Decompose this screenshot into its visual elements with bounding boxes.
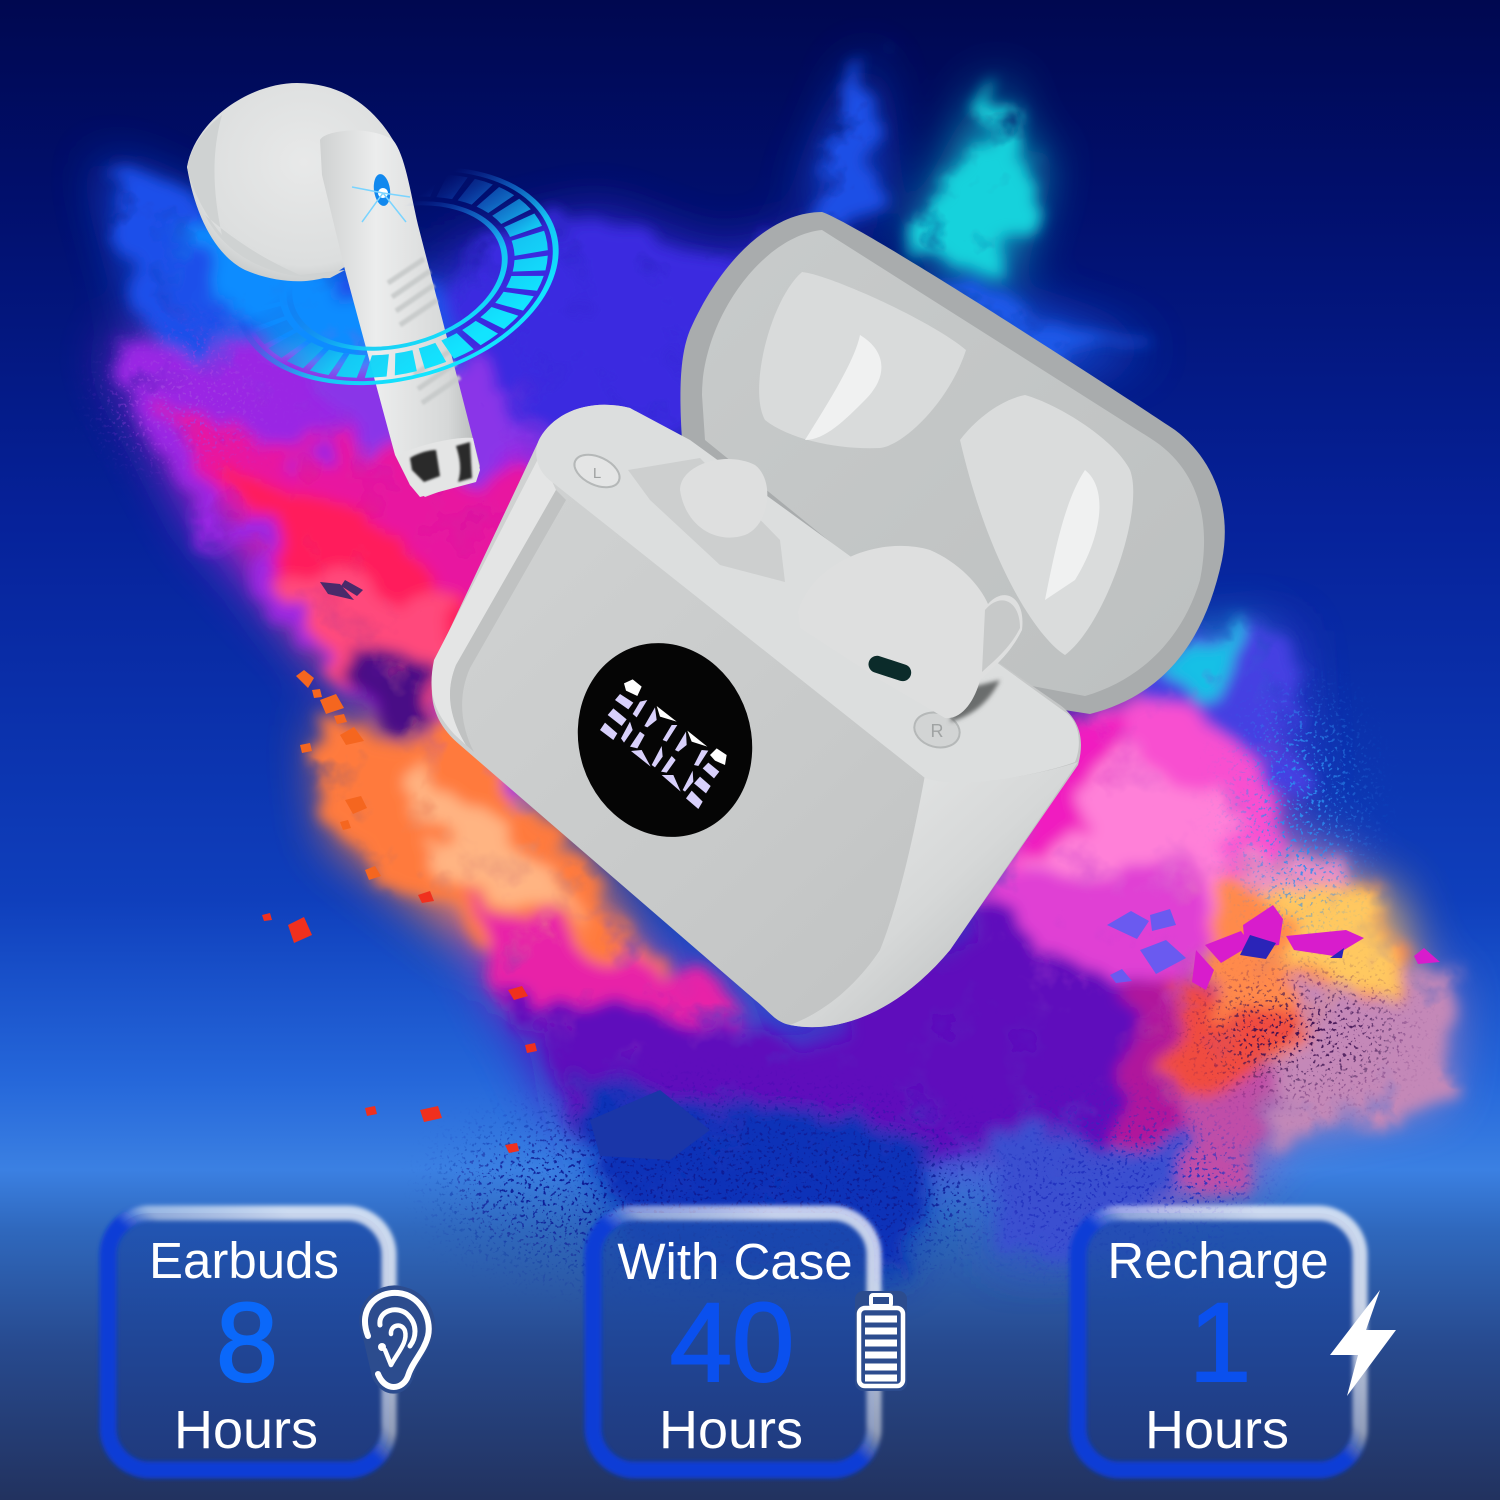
deck left cavity bbox=[628, 458, 785, 582]
card label: With Case bbox=[617, 1233, 853, 1290]
lid left cavity bbox=[759, 272, 966, 448]
earbud stem bbox=[320, 131, 480, 497]
sound ring bbox=[214, 135, 580, 417]
icon: battery bbox=[855, 1291, 907, 1391]
card frame bbox=[593, 1213, 874, 1470]
L marker: L bbox=[593, 465, 601, 482]
R marker bbox=[910, 708, 964, 752]
card frame bbox=[108, 1213, 389, 1470]
powder shards bbox=[262, 580, 1440, 1160]
card unit: Hours bbox=[174, 1400, 318, 1460]
lid right cavity bbox=[960, 395, 1133, 655]
head underside facet bbox=[187, 115, 345, 278]
L marker bbox=[569, 448, 625, 494]
cavity highlights bbox=[805, 335, 1099, 600]
card label: Recharge bbox=[1107, 1232, 1329, 1289]
case side facet bbox=[790, 762, 1078, 1027]
LED display bbox=[553, 620, 777, 860]
lid outer shell bbox=[680, 212, 1225, 714]
powder explosion cloud bbox=[100, 50, 1450, 1270]
icon: lightning bolt bbox=[1330, 1290, 1396, 1396]
card value: 1 bbox=[1189, 1280, 1251, 1405]
card value: 8 bbox=[216, 1280, 278, 1405]
display segments bbox=[600, 679, 727, 809]
R marker: R bbox=[930, 721, 944, 741]
stored eartip bbox=[680, 459, 767, 538]
stat card: earbuds bbox=[108, 1213, 430, 1470]
card unit: Hours bbox=[1145, 1400, 1289, 1460]
icon: ear bbox=[364, 1290, 430, 1389]
front inner band bbox=[450, 490, 566, 752]
chrome tip bbox=[398, 438, 480, 497]
case deck bbox=[536, 405, 1079, 782]
earbud floating bbox=[187, 83, 480, 497]
LED indicator bbox=[352, 173, 410, 222]
charging case bbox=[432, 212, 1225, 1027]
earbud head bbox=[187, 83, 400, 281]
case body bbox=[432, 405, 1081, 1027]
stat card: with case bbox=[593, 1213, 907, 1470]
card unit: Hours bbox=[659, 1400, 803, 1460]
front left bevel bbox=[432, 455, 556, 745]
card label: Earbuds bbox=[149, 1232, 339, 1289]
stem ridges bbox=[388, 259, 460, 403]
stored earbud bbox=[798, 546, 1022, 722]
stat card: recharge bbox=[1078, 1213, 1396, 1470]
card frame bbox=[1078, 1213, 1360, 1470]
card value: 40 bbox=[670, 1280, 794, 1405]
lid tray bbox=[702, 230, 1204, 696]
